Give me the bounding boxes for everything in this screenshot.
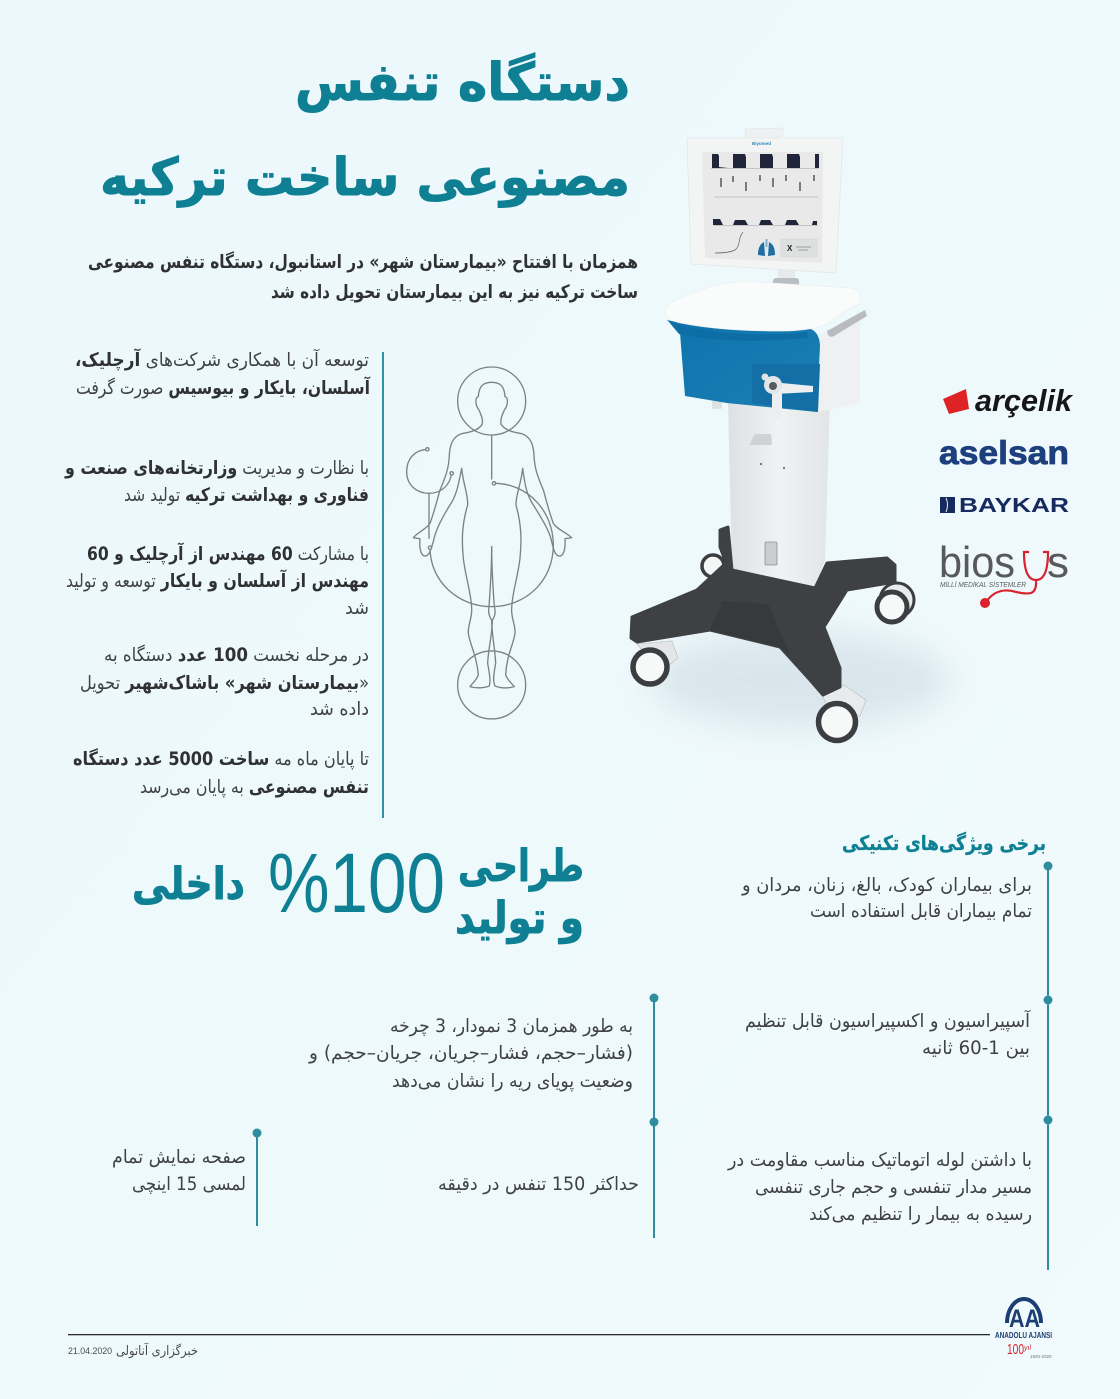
timeline right: [1044, 862, 1052, 1270]
text: engineers: با مشارکت 60 مهندس از آرچلیک و 60: [87, 542, 369, 565]
column: [728, 400, 830, 588]
headline: 100% domestic: %100: [268, 836, 445, 930]
feature: automatic tube: رسیده به بیمار را تنظیم می‌کند: [809, 1204, 1032, 1225]
feature: graphs: [308, 1016, 633, 1092]
feature: automatic tube: مسیر مدار تنفسی و حجم جاری تنفسی: [755, 1177, 1032, 1198]
feature: breaths per minute: حداکثر 150 تنفس در دقیقه: [438, 1174, 639, 1195]
intro text: ساخت ترکیه نیز به این بیمارستان تحویل داده شد: [271, 282, 638, 303]
logo: Anadolu Agency: 100: [1007, 1341, 1024, 1358]
feature: touch screen: [112, 1147, 246, 1195]
left column rule: [382, 352, 384, 818]
feature: patients: برای بیماران کودک، بالغ، زنان، مردان و: [741, 875, 1032, 896]
logo: baykar: BAYKAR: [959, 495, 1070, 517]
text: ministries: [64, 458, 369, 506]
timeline left: [252, 1128, 262, 1226]
title: مصنوعی ساخت ترکیه: [100, 148, 630, 208]
feature: touch screen: لمسی 15 اینچی: [132, 1174, 246, 1195]
feature: patients: تمام بیماران قابل استفاده است: [810, 901, 1032, 922]
text: production target: تا پایان ماه مه ساخت 5000 عدد دستگاه: [73, 748, 369, 770]
headline: 100% domestic: [132, 836, 584, 944]
feature: inspiration and expiration: آسپیراسیون و اکسپیراسیون قابل تنظیم: [745, 1009, 1031, 1032]
text: partner companies: توسعه آن با همکاری شرکت‌های آرچلیک،: [75, 348, 369, 371]
text: production target: تنفس مصنوعی به پایان می‌رسد: [140, 777, 369, 798]
logo: Anadolu Agency: [995, 1299, 1052, 1359]
text: ministries: فناوری و بهداشت ترکیه تولید شد: [124, 485, 369, 506]
text: first phase delivery: در مرحله نخست 100 عدد دستگاه به: [104, 644, 369, 666]
footer rule: [68, 1334, 990, 1335]
intro text: [88, 251, 638, 303]
logo: biosys: bios: [939, 538, 1015, 587]
logo: Anadolu Agency: ANADOLU AJANSI: [995, 1331, 1052, 1340]
text: partner companies: آسلسان، بایکار و بیوسیس صورت گرفت: [76, 376, 371, 399]
feature: inspiration and expiration: [745, 1009, 1031, 1059]
logo: arcelik: arçelik: [975, 383, 1074, 418]
feature: graphs: وضعیت پویای ریه را نشان می‌دهد: [392, 1071, 633, 1092]
ventilator device: [631, 128, 950, 740]
logo: baykar: [940, 495, 1070, 517]
footer credit: خبرگزاری آناتولی: [116, 1342, 198, 1359]
logo: biosys: MİLLİ MEDİKAL SİSTEMLER: [940, 580, 1027, 589]
logo: Anadolu Agency: 1920-2020: [1030, 1354, 1052, 1359]
headline: 100% domestic: داخلی: [132, 859, 245, 910]
feature: patients: [741, 875, 1032, 922]
headline: 100% domestic: طراحی: [458, 841, 584, 892]
intro text: همزمان با افتتاح «بیمارستان شهر» در استانبول، دستگاه تنفس مصنوعی: [88, 251, 638, 273]
feature: inspiration and expiration: بین 1-60 ثانیه: [922, 1038, 1030, 1059]
feature: automatic tube: با داشتن لوله اتوماتیک مناسب مقاومت در: [727, 1150, 1032, 1171]
text: partner companies: [75, 348, 371, 399]
monitor: X: [787, 244, 793, 253]
feature: graphs: به طور همزمان 3 نمودار، 3 چرخه: [390, 1016, 633, 1037]
text: engineers: شد: [345, 598, 369, 619]
title: دستگاه تنفس: [295, 52, 630, 113]
text: production target: [73, 748, 369, 798]
footer credit: 21.04.2020: [68, 1346, 112, 1357]
feature: touch screen: صفحه نمایش تمام: [112, 1147, 246, 1168]
monitor: [687, 128, 843, 290]
logo: Anadolu Agency: AA: [1009, 1305, 1040, 1333]
title: [100, 52, 630, 208]
text: first phase delivery: [80, 644, 369, 720]
logo: biosys: s: [1047, 538, 1069, 587]
heading: technical features: برخی ویژگی‌های تکنیکی: [842, 831, 1046, 855]
timeline middle: [650, 994, 658, 1238]
text: first phase delivery: «بیمارستان شهر» باشاک‌شهیر تحویل: [80, 673, 369, 694]
feature: graphs: (فشار–حجم، فشار–جریان، جریان–حجم) و: [308, 1043, 633, 1064]
logo: biosys: [939, 538, 1069, 608]
feature: automatic tube: [727, 1150, 1032, 1225]
text: engineers: [66, 542, 369, 619]
text: ministries: با نظارت و مدیریت وزارتخانه‌های صنعت و: [64, 458, 369, 479]
body diagram: human outline with circuit rings: [407, 367, 572, 719]
monitor: Biyomed: [752, 141, 771, 146]
cart body: [666, 281, 867, 420]
headline: 100% domestic: و تولید: [455, 893, 584, 944]
base with casters: [631, 527, 914, 740]
text: engineers: مهندس از آسلسان و بایکار توسعه و تولید: [66, 569, 369, 592]
logo: aselsan: aselsan: [939, 434, 1069, 471]
text: first phase delivery: داده شد: [310, 699, 369, 720]
logo: Anadolu Agency: yıl: [1023, 1345, 1031, 1352]
footer credit: [68, 1342, 198, 1359]
